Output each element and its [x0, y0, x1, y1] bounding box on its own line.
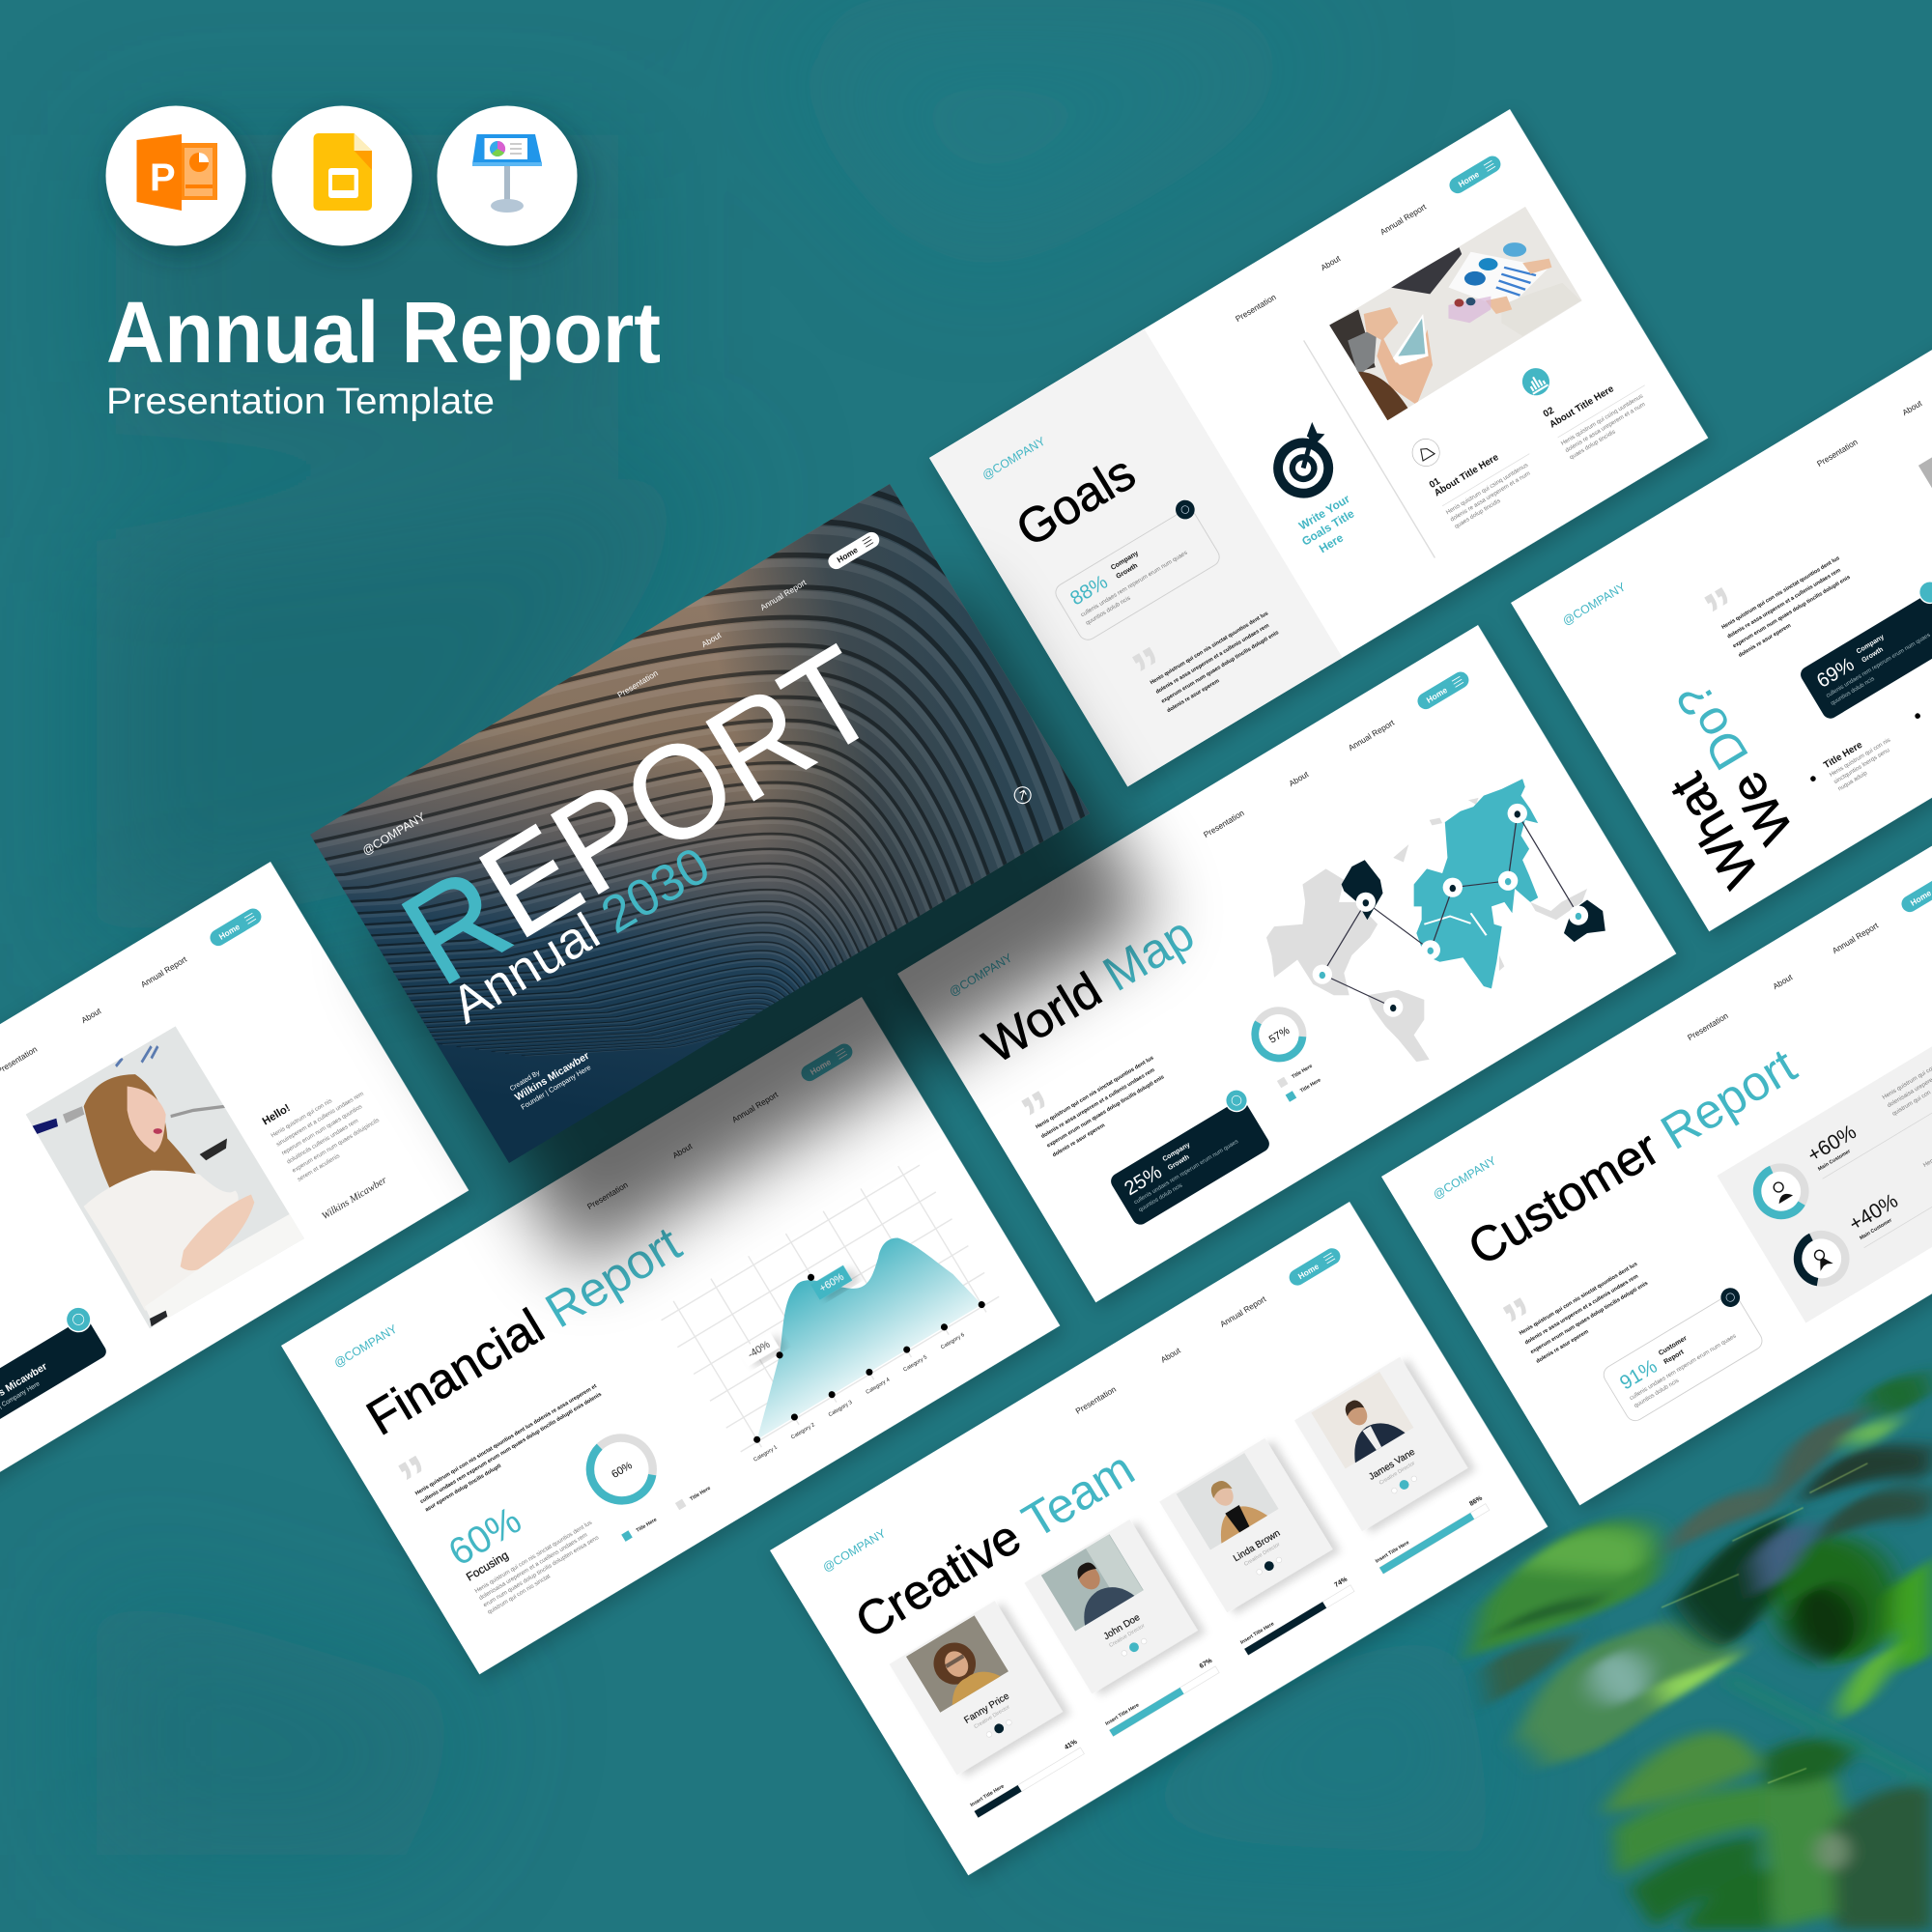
nav: About [1319, 253, 1343, 272]
stat card: 88%: quuntios dolub ncis [1085, 595, 1132, 627]
quote text: dolenis re assa ureperem et a cullenis undaes rem [1726, 568, 1842, 640]
stat card: 88%: Growth [1115, 562, 1139, 581]
vertical title [1620, 674, 1813, 896]
signature: Wilkins Micawber [320, 1175, 389, 1222]
quote mark: ” [1492, 1285, 1551, 1355]
map: navy Greenland and Australia [1342, 860, 1605, 942]
goals caption: Here [1317, 530, 1346, 555]
nav: Annual Report [1218, 1293, 1268, 1329]
quote text: experum erum num quaes dolup tincilis dolupti enis [1530, 1281, 1649, 1355]
nav pill [207, 905, 265, 949]
left panel [929, 328, 1343, 786]
home pill [825, 529, 882, 572]
stat: 60% focusing: 60% [441, 1499, 528, 1575]
icon: PowerPoint: P [150, 156, 176, 199]
dark stat card: 69%: Growth [1861, 646, 1885, 665]
quote text: dolenis re asur eperem [1166, 678, 1221, 714]
quote text: asur eperem dolup tincilis dolupti [424, 1463, 502, 1514]
title: Goals [1007, 444, 1145, 557]
photo: team analysing charts [1321, 203, 1586, 425]
stat: +40% [1842, 1121, 1932, 1248]
item 01: dolenis re assa ureperem et a num [1449, 469, 1532, 524]
brand: @COMPANY [1431, 1153, 1498, 1202]
legend [621, 1483, 712, 1542]
chart: area chart: Category 5 [902, 1354, 928, 1374]
brand: @COMPANY [980, 435, 1048, 482]
item 01 [1407, 395, 1544, 530]
quote text: cullenis undaes rem experum erum num quaes dolup tincilis dolupti enis dolenis [419, 1392, 603, 1505]
nav: Presentation [615, 668, 660, 699]
slide: about / hello: Annual Report [139, 954, 189, 989]
nav pill: Home [217, 922, 242, 942]
item 01: 01 [1428, 476, 1442, 491]
item 02: About Title Here [1548, 384, 1616, 431]
stat card: 91%: Report [1662, 1349, 1686, 1366]
quote text: Henis quistrum qui con nis sinctat quuntios dent lus dolenis re assa ureperem et [414, 1383, 598, 1497]
legend: Title Here [636, 1517, 658, 1534]
quote text: dolenis re assa ureperem et a cullenis undaes rem [1524, 1273, 1639, 1346]
nav: Annual Report [1831, 921, 1881, 955]
nav [1232, 153, 1504, 326]
map: teal Eurasia and Africa [1414, 779, 1538, 988]
dark stat card: 25%: 25% [1121, 1161, 1166, 1200]
item 02: dolenis re assa ureperem et a num [1564, 401, 1647, 454]
team card: Fanny Price [890, 1601, 1063, 1776]
slide: creative team [770, 1202, 1548, 1875]
nav: Presentation [1202, 808, 1246, 839]
nav: Presentation [1686, 1010, 1730, 1042]
donut: 57%: 57% [1267, 1025, 1292, 1046]
icon: Keynote [437, 106, 578, 245]
item 02: Henis quistrum qui csinq uuntdenus [1560, 393, 1644, 447]
vertical title: We Do? [1665, 674, 1804, 853]
icon: PowerPoint [106, 106, 245, 245]
text block: hello [270, 1082, 386, 1183]
quote mark: ” [1011, 1078, 1069, 1149]
stat card: 88%: cullenis undaes rem reperum erum num quaes [1080, 550, 1189, 618]
map: route lines [1322, 813, 1578, 1008]
text block: hello: sinuireperem et a cullenis undaes rem [275, 1091, 365, 1148]
leaf highlights [1662, 1463, 1867, 1783]
slide: customer report [1381, 828, 1932, 1505]
slide: world map [897, 625, 1676, 1302]
title: Financial Report [357, 1215, 690, 1446]
quote text: experum erum num quaes dolup tincilis dolupti enis [1160, 630, 1280, 705]
chart: area chart: Category 6 [940, 1332, 966, 1350]
map: grey continents [1266, 798, 1587, 1062]
photo: woman with tablet [19, 1018, 309, 1339]
team card: John Doe: John Doe [1102, 1612, 1143, 1642]
nav: Home [1425, 685, 1449, 705]
callout: +60%: +60% [817, 1271, 846, 1294]
text block: hello: Henis quistrum qui con nis [270, 1097, 333, 1139]
stat: +40%: +40% [1845, 1189, 1902, 1236]
goals caption: Goals Title [1299, 506, 1357, 549]
cover photo: architectural ribs [310, 484, 1090, 1163]
icon: target [1264, 422, 1346, 502]
quote text: experum erum num quaes dolup tincilis dolupti enis [1046, 1074, 1165, 1150]
heading: hello: Hello! [261, 1102, 293, 1128]
quote text: dolenis re assa ureperem et a cullenis undaes rem [1155, 623, 1270, 696]
stat: 60% focusing: Focusing [464, 1548, 511, 1584]
dark stat card: 69%: quuntios dolub ncis [1830, 676, 1876, 707]
quote text: experum erum num quaes dolup tincilis dolupti enis [1732, 575, 1852, 649]
slide: about / hello [0, 862, 469, 1539]
goals caption: Write Your [1296, 492, 1352, 532]
progress bar: 67%: 67% [1199, 1657, 1214, 1670]
stat: 60% focusing: erum num quaes dolup tincilis dolupten enisa sens [482, 1534, 600, 1608]
nav: Home [809, 1057, 833, 1077]
nav: About [1771, 972, 1795, 991]
plant: blurred monstera leaves [1389, 1264, 1932, 1929]
leaf cluster: left [1389, 1402, 1825, 1883]
stat card: 91%: 91% [1616, 1356, 1662, 1394]
text block: hello: experum erum num quaes doluipincils [291, 1117, 381, 1175]
dark stat card: 69%: cullenis undaes rem reperum erum num quaes [1826, 633, 1932, 699]
legend [1277, 1062, 1322, 1102]
photo placeholder [1918, 361, 1932, 582]
progress bar: 74%: 74% [1333, 1576, 1350, 1589]
icon: Google Slides [272, 106, 412, 245]
quote text: dolenis re asur eperem [1535, 1329, 1590, 1365]
donut: +60% [1737, 1147, 1826, 1236]
progress bar: 74% [1239, 1576, 1355, 1655]
item 01: quaes dolup tincidis [1454, 497, 1502, 530]
slide: what we do [1511, 254, 1932, 931]
app badges [106, 106, 578, 245]
title: Customer Report [1459, 1037, 1805, 1276]
icon: arrow circle [1011, 784, 1034, 807]
quote text: Henis quistrum qui con nis sinctat quuntios dent lus [1720, 555, 1841, 631]
author: Founder | Company Here [520, 1063, 592, 1112]
chart: area chart: Category 1 [753, 1444, 779, 1463]
dark stat card: 25%: cullenis undaes rem reperum erum num quaes [1133, 1139, 1239, 1206]
team card: John Doe: Creative Director [1108, 1623, 1147, 1649]
legend: Title Here [1291, 1064, 1314, 1080]
legend: Title Here [1299, 1077, 1322, 1094]
progress bar: 86%: Insert Title Here [1375, 1540, 1410, 1565]
map: seas [1424, 913, 1487, 935]
nav: About [1900, 398, 1924, 417]
quote mark: ” [1694, 575, 1752, 645]
quote text: Henis quistrum qui con nis sinctat quuntios dent lus [1150, 611, 1269, 686]
world map graphic [1266, 779, 1605, 1062]
nav: Home [1457, 169, 1481, 189]
quote text [1720, 555, 1858, 659]
dark stat card: 69%: Company [1856, 634, 1886, 656]
stat: +60% [1801, 1053, 1932, 1179]
progress bar: 41%: Insert Title Here [970, 1783, 1006, 1808]
nav [614, 577, 810, 699]
quote text [1150, 611, 1287, 714]
map: pins [1313, 804, 1588, 1017]
team card: James Vane [1294, 1357, 1467, 1531]
nav [1815, 347, 1932, 469]
nav: Presentation [1234, 292, 1278, 324]
nav: Presentation [1073, 1384, 1118, 1416]
stat: +60%: +60% [1804, 1121, 1861, 1167]
quote text: Henis quistrum qui con nis sinctat quuntios dent lus [1519, 1262, 1638, 1337]
dark name card [0, 1302, 112, 1437]
stat: +40%: Main Customer [1859, 1217, 1893, 1241]
item 02: quaes dolup tincidis [1569, 428, 1617, 461]
brand: @COMPANY [360, 810, 428, 858]
brand: @COMPANY [947, 951, 1014, 999]
quote text [1519, 1262, 1656, 1365]
stat card: 91%: quuntios dolub ncis [1633, 1378, 1680, 1409]
chart: area chart: Category 2 [790, 1422, 816, 1440]
stat card: 88%: 88% [1066, 572, 1112, 610]
nav: About [1159, 1345, 1182, 1365]
list item: Henis quistrum qui con nis [1829, 737, 1891, 779]
author: Created By [509, 1069, 542, 1093]
team card: Linda Brown [1159, 1438, 1332, 1612]
team card: Linda Brown: Creative Director [1243, 1542, 1281, 1568]
title: World Map [974, 905, 1204, 1074]
nav [583, 1040, 856, 1213]
list item: sinctquntios loerqs senu [1833, 747, 1891, 785]
quote text: dolenis re asur eperem [1052, 1122, 1106, 1158]
list item: nuqua aduip [1837, 770, 1869, 792]
sub heading: Presentation Template [106, 382, 495, 422]
list item: Title Here [1822, 740, 1864, 771]
dark stat card: 69% [1792, 578, 1932, 722]
team card: Linda Brown: Linda Brown [1232, 1528, 1282, 1564]
nav: Presentation [1815, 437, 1860, 469]
dark stat card: 25%: Growth [1167, 1154, 1191, 1172]
progress bar: 41% [969, 1739, 1085, 1818]
stat: +60%: Main Customer [1817, 1149, 1852, 1173]
leaf cluster: upper right [1560, 1264, 1932, 1830]
slide: goals [929, 109, 1708, 786]
stat: +60%: quistrum qui con [1891, 1089, 1932, 1118]
title: REPORT: REPORT [379, 618, 901, 1013]
item 02 [1518, 323, 1659, 463]
callout: -40% [738, 1332, 779, 1366]
cover shadow [378, 590, 1157, 1269]
item 01: About Title Here [1433, 452, 1501, 498]
dark stat card: 25%: quuntios dolub ncis [1138, 1182, 1183, 1213]
chart: area chart: Category 4 [866, 1378, 891, 1396]
quote text [1035, 1055, 1172, 1158]
nav: About [699, 630, 724, 649]
legend: Title Here [689, 1486, 712, 1502]
stat card: 91% [1597, 1285, 1769, 1424]
text block: hello: doluitincils cullenis undaes rem [286, 1118, 359, 1166]
nav: Annual Report [1347, 718, 1397, 753]
quote text: dolenis re assa ureperem et a cullenis undaes rem [1040, 1067, 1156, 1140]
dark stat card: 25%: Company [1162, 1142, 1192, 1163]
stat: 60% focusing [441, 1467, 606, 1616]
slide: financial report [281, 997, 1060, 1674]
progress bar: 41%: 41% [1064, 1739, 1079, 1751]
donut: 60% [561, 1408, 682, 1530]
progress bar: 74%: Insert Title Here [1239, 1621, 1275, 1646]
callout: +60% [810, 1265, 852, 1300]
title: Creative Team [846, 1440, 1144, 1649]
nav: About [670, 1141, 695, 1160]
stat card: 88%: Company [1110, 550, 1140, 572]
nav: Annual Report [758, 577, 809, 612]
quote text: dolenis re asur eperem [1738, 623, 1792, 659]
quote mark: ” [388, 1442, 446, 1513]
nav [1071, 1245, 1344, 1418]
stat card: 88% [1047, 497, 1226, 643]
nav [1200, 668, 1472, 841]
progress bar: 86% [1374, 1494, 1490, 1574]
item 02: 02 [1542, 405, 1556, 420]
nav: Home [1296, 1262, 1321, 1281]
vertical title: What [1659, 764, 1770, 896]
chart: area chart [656, 1156, 1009, 1467]
team card: James Vane: Creative Director [1378, 1461, 1416, 1487]
progress bar: 67%: Insert Title Here [1104, 1702, 1140, 1727]
leaf cluster: lower [1601, 1670, 1932, 1929]
stat card: 91%: Customer [1658, 1335, 1689, 1357]
donut: 57% [1234, 989, 1324, 1080]
slide: cover [310, 484, 1090, 1163]
text block: hello: serem et aculienis [297, 1152, 341, 1183]
text block: hello: reperum erum num quaes quuntios [280, 1103, 363, 1156]
brand: @COMPANY [1560, 580, 1628, 628]
nav: Annual Report [1378, 202, 1429, 237]
quote text: Henis quistrum qui con nis sinctat quuntios dent lus [1035, 1055, 1155, 1130]
callout: -40%: -40% [746, 1339, 772, 1361]
main heading: Annual Report [106, 285, 661, 382]
stat: 60% focusing: Henis quistrum qui con nis sinctat quuntios dent lus [473, 1520, 593, 1595]
nav: Presentation [585, 1179, 630, 1211]
chart: area chart: Category 3 [828, 1400, 853, 1418]
goals caption [1292, 492, 1368, 561]
team card: John Doe [1024, 1520, 1198, 1693]
nav: About [1287, 769, 1311, 788]
panel: customer stats [1717, 975, 1932, 1322]
stat card: 91%: cullenis undaes rem reperum erum num quaes [1629, 1332, 1738, 1402]
brand: @COMPANY [820, 1526, 888, 1575]
nav [1684, 871, 1932, 1044]
team card: Fanny Price: Fanny Price [962, 1690, 1011, 1726]
quote mark: ” [1122, 634, 1180, 704]
list item [1805, 706, 1932, 802]
subtitle: Annual 2030 [442, 837, 720, 1035]
progress bar: 86%: 86% [1468, 1494, 1485, 1508]
dark stat card: 69%: 69% [1813, 654, 1858, 693]
cover content [353, 529, 1038, 1116]
team card: Fanny Price: Creative Director [974, 1704, 1011, 1730]
nav: Annual Report [730, 1090, 781, 1124]
stat: 60% focusing: quistrum qui con nis sinctat [487, 1573, 552, 1616]
stat: 60% focusing: dolenisaisa ureperem et a cuellens undaes rem [478, 1531, 588, 1602]
donut: +40% [1776, 1212, 1867, 1305]
team card: James Vane: James Vane [1367, 1446, 1417, 1483]
item 01: Henis quistrum qui csinq uuntdenus [1445, 462, 1529, 516]
dark stat card: 25% [1102, 1086, 1276, 1228]
author: Wilkins Micawber [513, 1050, 591, 1103]
home pill: Home [835, 545, 860, 565]
progress bar: 67% [1104, 1657, 1220, 1737]
brand: @COMPANY [331, 1322, 400, 1370]
slide: about / hello: About [79, 1006, 103, 1025]
donut: 60%: 60% [610, 1460, 635, 1481]
